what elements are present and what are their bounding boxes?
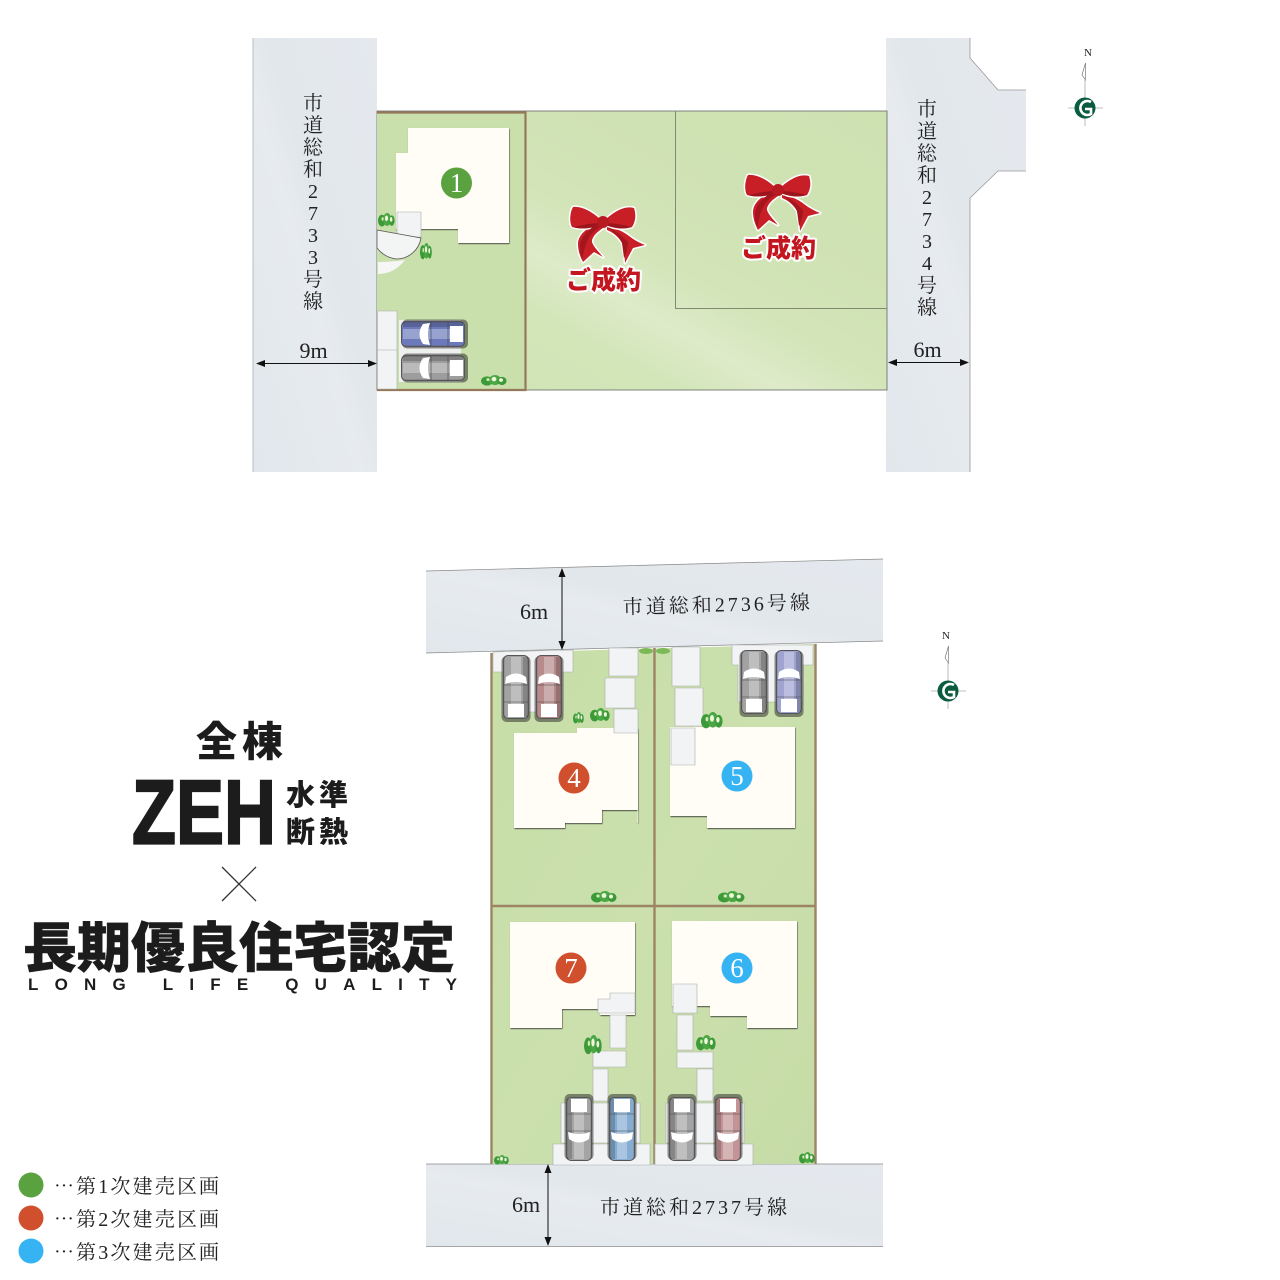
car pad (399, 320, 461, 382)
sold plot dividing line (676, 111, 887, 308)
heading: 断熱: 断熱 (286, 816, 348, 849)
house 7 (510, 922, 635, 1028)
heading: 水準: 水準 (286, 779, 348, 812)
dimension 6m right (888, 337, 969, 366)
top site plan (253, 38, 1103, 472)
headline block (23, 719, 458, 994)
road name 2734: 市道総和2734号線 (917, 98, 938, 319)
lot 7 (494, 922, 650, 1165)
number badge 4 (558, 762, 590, 794)
dimension 6m bottom (512, 1164, 552, 1246)
walkway 4 (605, 648, 638, 708)
lot 1 boundary (377, 112, 526, 390)
shrubs 4 (573, 708, 610, 724)
parking pad 5 (732, 645, 813, 702)
car: blue (401, 320, 468, 348)
entrance porch (397, 212, 421, 237)
car red 6 (714, 1094, 742, 1161)
road: 市道総和2737号線 (426, 1164, 883, 1246)
legend item 3: …第3次建売区画 (54, 1236, 219, 1265)
lots ground (491, 644, 816, 1164)
shrub 6 (696, 1035, 716, 1050)
heading: 全棟: 全棟 (196, 719, 283, 765)
car blue 5 (774, 650, 804, 717)
parking pad 4 (493, 650, 573, 712)
dimension 6m top: 6m (520, 599, 548, 624)
number badge 1: 1 (450, 168, 463, 198)
small shrub (420, 243, 432, 259)
car blue 7 (608, 1094, 636, 1161)
dimension 6m bottom: 6m (512, 1192, 540, 1217)
sold label right: ご成約 (741, 234, 816, 263)
legend item 1: …第1次建売区画 (54, 1170, 219, 1199)
road: 市道総和2733号線 (253, 38, 377, 472)
number badge 6: 6 (730, 953, 744, 983)
hedge at boundary (639, 648, 670, 654)
shrub lower (481, 375, 506, 386)
dimension 6m top (520, 568, 566, 650)
heading: 長期優良住宅認定: 長期優良住宅認定 (23, 919, 455, 979)
car grey 5 (740, 650, 768, 717)
car grey 4 (502, 655, 530, 722)
porch 7 (598, 993, 635, 1013)
parking paving (378, 311, 397, 389)
north compass top (1068, 47, 1103, 126)
shrub 5 (701, 712, 723, 728)
shrub 5 bottom (718, 891, 744, 902)
road: 市道総和2736号線 (426, 559, 883, 653)
shrub 6 corner (799, 1152, 815, 1164)
porch 6 (673, 984, 697, 1013)
road: 市道総和2734号線 (886, 38, 1026, 472)
parking pad 6 (655, 1103, 753, 1165)
north compass bottom: N (942, 630, 950, 642)
north compass bottom (931, 630, 966, 709)
lot 4 (493, 648, 638, 902)
multiplication mark (222, 867, 256, 901)
heading: ZEH: ZEH (132, 762, 276, 864)
number badge 5: 5 (730, 761, 744, 791)
sold label left: ご成約 (566, 266, 641, 295)
sold ribbon right (741, 175, 820, 263)
lot 6 (655, 921, 815, 1165)
road name 2733: 市道総和2733号線 (303, 92, 324, 313)
north compass top: N (1084, 47, 1092, 59)
porch 4 (614, 709, 638, 733)
legend (18, 1170, 219, 1265)
subheading: LONG LIFE QUALITY: LONG LIFE QUALITY (28, 975, 458, 994)
road name 2736: 市道総和2736号線 (623, 591, 810, 619)
walkway 6 (677, 1015, 713, 1101)
shrub 4 bottom (591, 891, 616, 902)
approach lower arc (378, 260, 405, 274)
number badge 1 (441, 168, 472, 198)
lot 1 (377, 112, 526, 390)
number badge 5 (722, 760, 752, 792)
number badge 4: 4 (567, 763, 581, 793)
car grey 7 (564, 1094, 594, 1161)
number badge 7: 7 (564, 953, 578, 983)
sold ribbon left (566, 207, 645, 295)
dimension 9m: 9m (299, 338, 328, 363)
porch 5 (671, 728, 695, 765)
legend item 2: …第2次建売区画 (54, 1203, 219, 1232)
car: grey (401, 354, 468, 382)
road name 2737: 市道総和2737号線 (600, 1196, 787, 1219)
house 4 (514, 728, 638, 828)
walkway 7 (593, 1015, 626, 1101)
number badge 6 (722, 952, 752, 984)
number badge 7 (556, 952, 586, 984)
shrub 7 (584, 1035, 602, 1054)
lot boundary lines (491, 644, 816, 1164)
dimension 6m right: 6m (913, 337, 942, 362)
lot 5 (670, 645, 813, 902)
bottom site plan (426, 559, 966, 1246)
house 1 (396, 128, 509, 243)
car grey 6 (668, 1094, 696, 1161)
parking pad 7 (553, 1103, 650, 1165)
shrub 7 corner (494, 1155, 509, 1165)
car red 4 (534, 655, 564, 722)
walkway 5 (672, 647, 703, 726)
house 6 (672, 921, 797, 1028)
approach paving arcs (377, 230, 421, 259)
house 5 (670, 727, 795, 828)
land parcel (377, 111, 887, 390)
dimension 9m (256, 338, 377, 367)
shrub near entrance (378, 213, 395, 226)
